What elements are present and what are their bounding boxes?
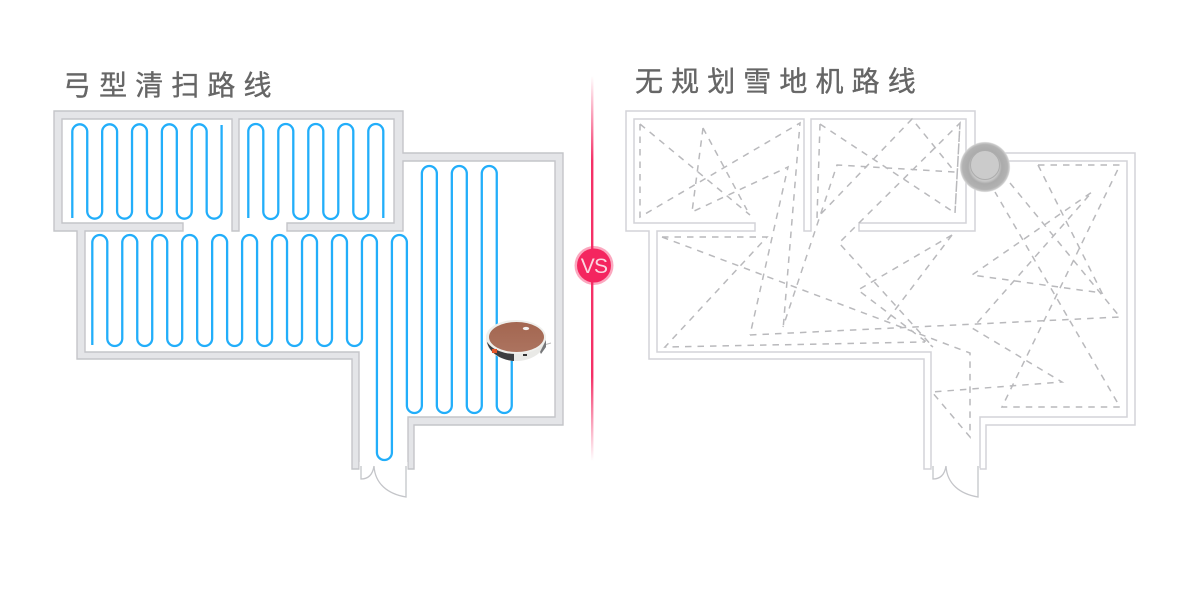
badge: VS: VS — [581, 255, 608, 278]
icon: grey robot top view — [960, 142, 1010, 192]
random dashed path: room 1 — [640, 123, 800, 335]
blue cleaning path: room 1 — [72, 124, 222, 219]
icon: brown robot vacuum — [486, 320, 551, 361]
blue cleaning path: living area and corridor — [92, 166, 512, 460]
floor plan walls — [54, 111, 563, 469]
random dashed path: living area — [662, 235, 1120, 437]
heading: serpentine route title: 弓型清扫路线 — [63, 70, 280, 101]
badge: VS — [574, 246, 614, 285]
doorway opening — [360, 462, 408, 470]
doorway opening — [932, 468, 980, 470]
panel: unplanned floor plan — [626, 111, 1135, 497]
random dashed path: room 2 — [783, 119, 960, 347]
panel: serpentine floor plan — [54, 111, 563, 497]
entrance doors — [933, 466, 978, 497]
floor plan walls — [626, 111, 1135, 469]
blue cleaning path: room 2 — [248, 124, 383, 219]
heading: unplanned route title: 无规划雪地机路线 — [635, 66, 924, 97]
divider: VS line — [591, 76, 593, 461]
entrance doors — [361, 466, 406, 497]
random dashed path: right room — [972, 165, 1120, 407]
